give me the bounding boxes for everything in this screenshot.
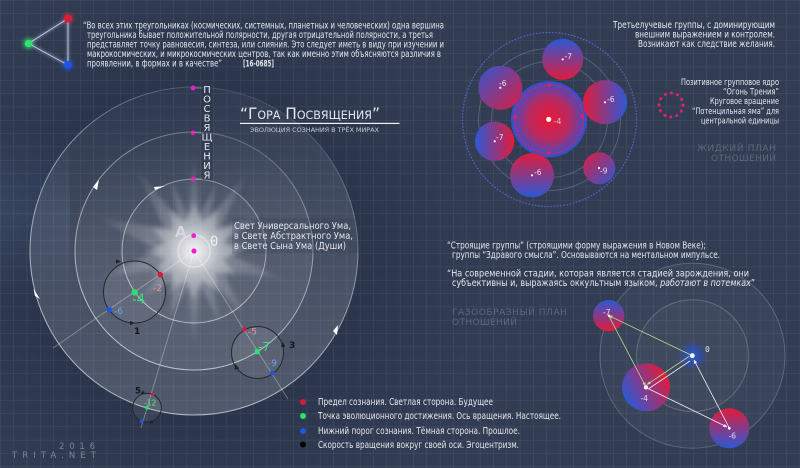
vertical word: И [203,161,211,172]
text block: light of mind: в Свете Абстрактного Ума, [234,231,353,242]
credit: TRITA.NET [11,451,97,461]
satellite 5: 5 [135,386,141,396]
diagram: building groups triangle: -6 [728,432,736,440]
text block: quote on triangles: представляет точку равновесия, синтеза, или слияния. Это следует иметь в виду при изучении и [87,40,444,50]
vertical word: О [203,94,211,106]
title [240,104,400,134]
legend: consciousness points [300,397,561,451]
text block: building groups: субъективны и, выражаясь оккультным языком, работают в потемках” [452,277,755,289]
vertical word: В [204,114,211,124]
title: ЭВОЛЮЦИЯ СОЗНАНИЯ В ТРЁХ МИРАХ [250,125,380,134]
central group core [511,81,587,157]
text block: building groups: “Строящие группы” (строящими форму выражения в Новом Веке); [447,240,706,252]
vertical word [201,84,213,182]
vertical word: Н [203,152,211,162]
legend: consciousness points: Предел сознания. Светлая сторона. Будущее [318,397,493,408]
text block: third-ray groups [612,20,775,50]
satellite 3: -7 [258,340,270,354]
diagram: mountain of initiation circles [30,87,358,428]
credit: 2016 [59,442,95,452]
diagram: third-ray groups: -6 [607,95,615,104]
text block: building groups [447,240,755,289]
credit [11,442,97,461]
vertical word: Я [204,170,210,182]
initiation markers [191,86,203,254]
heading: liquid plane [697,142,776,164]
text block: quote on triangles [83,20,444,70]
heading: gaseous plane [452,306,567,328]
satellite 3: -9 [268,359,277,369]
vertical word: П [203,85,211,96]
diagram: third-ray groups [462,32,636,206]
satellite 3: 3 [289,341,295,351]
labels A and 0 [175,223,218,250]
vertical word: С [204,104,211,115]
diagram: building groups triangle: 0 [705,345,710,354]
central group core: -4 [554,117,561,126]
heading: liquid plane: ОТНОШЕНИЙ [711,152,776,164]
diagram: third-ray groups: -9 [600,166,608,176]
text block: group core legend: “Огонь Трения” [723,88,779,98]
diagram: building groups triangle: -7 [603,308,611,317]
heading: liquid plane: ЖИДКИЙ ПЛАН [697,142,776,154]
text block: quote on triangles: макрокосмических, и микрокосмических центров, так как именно этим объясняются различия в [87,49,441,60]
satellite 1 [104,260,166,337]
vertical word: Я [204,123,210,134]
satellite 3: -5 [248,328,257,338]
icon: polarity triangle [22,12,74,71]
legend: consciousness points: Нижний порог сознания. Тёмная сторона. Прошлое. [318,426,520,437]
text block: quote on triangles: [16-0685] [243,60,274,70]
legend: consciousness points: Точка эволюционного достижения. Ось вращения. Настоящее. [317,411,561,422]
heading: gaseous plane: ОТНОШЕНИЙ [452,316,517,328]
diagram: building groups triangle: -4 [640,394,648,403]
text block: quote on triangles: “Во всех этих треугольниках (космических, системных, планетных и человеческих) одна вершина [83,20,444,32]
arrows [609,316,729,428]
icon: dotted ring legend [659,93,683,117]
satellite 5: -12 [144,398,156,408]
diagram: third-ray groups: -7 [496,133,504,142]
heading: gaseous plane: ГАЗООБРАЗНЫЙ ПЛАН [452,306,567,318]
legend: consciousness points: Скорость вращения вокруг своей оси. Эгоцентризм. [318,440,519,451]
labels A and 0: 0 [210,234,218,250]
text block: group core legend [681,78,779,126]
satellite 1: -2 [153,284,162,294]
satellite 1: -4 [132,292,145,308]
vertical word: Щ [202,132,213,144]
diagram: third-ray groups: -6 [499,79,507,88]
satellite 1: 1 [134,327,140,337]
diagram: third-ray groups: -6 [534,168,542,177]
text block: light of mind: в Свете Сына Ума (Души) [234,241,346,252]
title: “ГОРА ПОСВЯЩЕНИЯ” [240,104,380,123]
satellite 1: -6 [114,307,123,317]
vertical word: Е [204,142,210,153]
labels A and 0: А [175,223,187,241]
text block: quote on triangles: треугольника бывает положительной полярности, другая отрицательной полярности, а третья [87,30,433,41]
text block: light of mind [232,218,360,254]
text block: quote on triangles: проявлении, в формах и в качестве” [87,58,222,70]
satellite 3 [232,326,295,378]
satellite 5 [133,386,161,424]
star burst [96,151,287,351]
diagram: third-ray groups: -7 [564,52,572,61]
diagram: building groups triangle [593,263,785,448]
arrows on orbits [34,180,338,335]
text block: light of mind: Свет Универсального Ума, [234,221,351,232]
